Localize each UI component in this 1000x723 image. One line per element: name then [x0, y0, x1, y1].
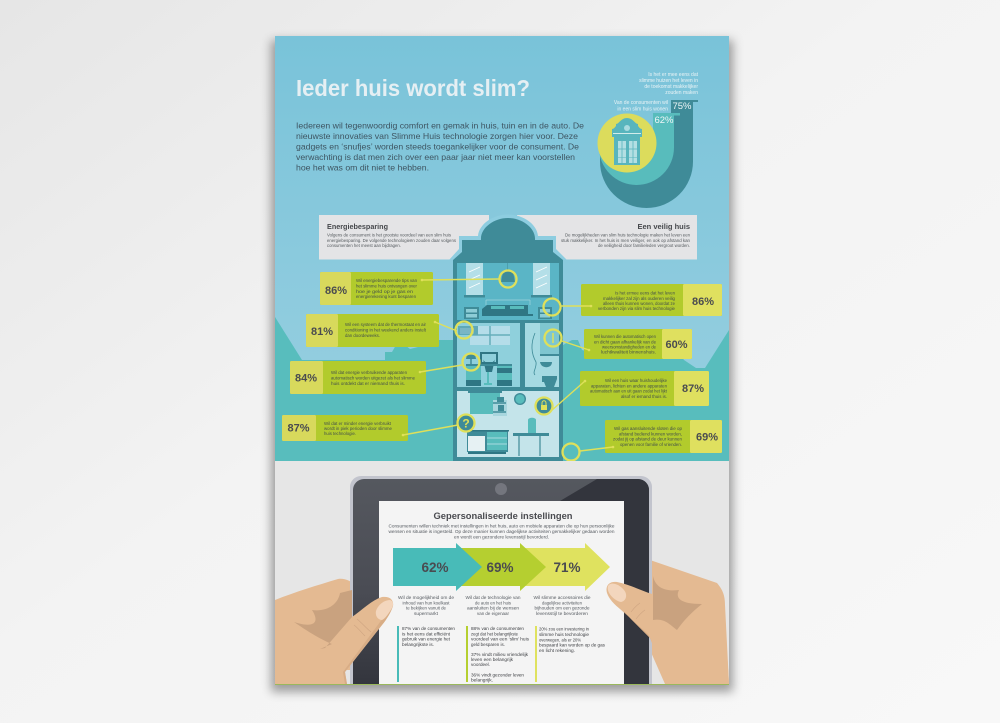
callout: 84% devices — [290, 361, 426, 394]
callout: 69% locks: Wil gas aansluitende sloten die op — [614, 426, 682, 431]
column details: zegt dat het belangrijkste — [471, 631, 518, 636]
column details — [397, 626, 606, 683]
column captions: Wil slimme accessoires die — [534, 595, 591, 601]
column captions: Wil dat de technologie van — [466, 595, 521, 601]
right hand back — [650, 560, 729, 684]
intro text block — [296, 120, 584, 172]
callout: 69% locks: 69% — [696, 432, 718, 444]
callout: 87% home automation: 87% — [682, 383, 704, 395]
landscape: hills and skyline — [275, 317, 729, 461]
right hand thumb — [606, 576, 729, 684]
callout: 84% devices: 84% — [295, 372, 317, 384]
callout: 86% elderly: 86% — [692, 296, 714, 308]
chart: radial stats 75% and 62% — [598, 72, 699, 208]
heading: Gepersonaliseerde instellingen: Gepersonaliseerde instellingen — [434, 511, 573, 522]
panel: Een veilig huis: de veiligheid door familieleden vergroot worden. — [598, 243, 690, 248]
callout: 60% windows: en dicht gaan afhankelijk van de — [594, 339, 656, 344]
nail — [608, 584, 626, 602]
chart: radial stats 75% and 62%: Is het er mee eens dat — [648, 72, 699, 78]
column details: bespaard kan worden op de gas — [539, 642, 606, 648]
callout: 86% elderly: Is het ermee eens dat het leven — [615, 290, 675, 296]
text block: tablet intro — [388, 524, 615, 540]
column captions: bijhouden om een gezonde — [534, 606, 590, 612]
illustration: house — [449, 214, 567, 461]
room: kitchen — [457, 391, 559, 457]
callout: 81% thermostat — [306, 314, 439, 347]
callout: 60% windows: weersomstandigheden en de — [602, 344, 656, 350]
column captions: van de eigenaar — [477, 611, 509, 617]
tablet — [350, 476, 652, 684]
text block: tablet intro: wensen en situatie is ingesteld. Op deze manier kunnen dagelijkse activiteiten gemakkelijker gedaan worden — [388, 529, 615, 535]
intro text block: hoe het was om dit niet te hebben. — [296, 162, 429, 172]
callout: 86% energy tips: 86% — [325, 285, 347, 297]
poster bottom edge — [275, 684, 729, 685]
panel: Een veilig huis — [517, 215, 697, 260]
column captions: inhoud van hun koelkast — [402, 600, 450, 606]
callout: 87% home automation: Wil een huis waar huishoudelijke — [605, 378, 667, 383]
room: bathroom — [525, 323, 559, 387]
screen — [379, 501, 624, 684]
chart: radial stats 75% and 62%: Van de consumenten wil — [614, 100, 668, 106]
callout: 87% home automation: apparaten, lichten en andere apparaten — [591, 383, 667, 388]
callout: 86% elderly: alleen thuis kunnen wonen, doordat ze — [603, 301, 675, 306]
connector lines and yellow hotspots — [402, 270, 614, 460]
panel: Een veilig huis: stuk makkelijker. In het huis is men veiliger, en ook op afstand kan — [561, 238, 690, 243]
intro text block: gadgets en ‘snufjes’ worden steeds toegankelijker voor de consument. De — [296, 142, 579, 152]
column details: overwegen, als er 20% — [539, 637, 581, 642]
panel: Energiebesparing — [319, 215, 489, 260]
column captions: levensstijl te bevorderen — [536, 611, 588, 617]
callout: 87% peak energy: 87% — [287, 422, 310, 434]
callout: 81% thermostat: 81% — [311, 326, 333, 338]
column captions: de auto en het huis — [475, 600, 512, 606]
callout: 81% thermostat: conditioning in het weekend anders instelt — [345, 328, 427, 332]
nail — [376, 600, 393, 620]
callout: 87% peak energy: Wil dat er minder energie verbruikt — [324, 421, 392, 426]
column details: 37% vindt milieu vriendelijk — [471, 652, 529, 657]
callout: 86% elderly: verbonden zijn via slim huis technologie — [598, 306, 675, 311]
panel: Een veilig huis: Een veilig huis — [637, 222, 690, 231]
chart: radial stats 75% and 62%: zouden maken — [665, 90, 698, 96]
callout: 69% locks: zodat jij op afstand de deur kunnen — [613, 437, 682, 442]
callout: 81% thermostat: Wil een systeem dat de thermostaat en air — [345, 322, 426, 327]
column details: belangrijk. — [471, 678, 493, 683]
callout: 81% thermostat: dan doordeweeks. — [345, 333, 380, 338]
callout: 86% elderly — [581, 284, 722, 316]
title: Ieder huis wordt slim? — [296, 75, 530, 101]
left hand thumb — [275, 590, 393, 684]
icon: camera — [495, 483, 507, 495]
chart: radial stats 75% and 62%: in een slim huis wonen — [617, 106, 668, 112]
callout: 86% energy tips: het slimme huis ontvangen over — [356, 284, 417, 288]
callout: 84% devices: automatisch worden uitgezet als het slimme — [331, 375, 415, 380]
callout: 87% home automation: alsof er iemand thuis is. — [621, 394, 667, 399]
callout: 60% windows: 60% — [665, 339, 688, 351]
column captions — [398, 595, 591, 617]
column details: slimme huis technologie — [539, 632, 589, 637]
column captions: supermarkt — [414, 611, 439, 617]
callout: 86% elderly: makkelijker zal zijn als ouderen veilig — [603, 296, 675, 301]
column details: leven een belangrijk — [471, 657, 514, 662]
room: study — [457, 323, 520, 387]
icon: question mark — [458, 414, 474, 432]
column details: is het eens dat efficiënt — [402, 631, 451, 636]
callout: 84% devices: Wil dat energie verbruikende apparaten — [331, 370, 407, 375]
callout: 69% locks — [605, 420, 722, 453]
callout: 86% energy tips — [320, 272, 433, 305]
callout: 86% energy tips: energierekening kunt besparen — [356, 294, 416, 299]
callout: 87% home automation — [580, 371, 709, 406]
callout: 60% windows — [584, 329, 692, 359]
panel: lower section background — [275, 461, 729, 684]
panel: Energiebesparing: energiebesparing. De volgende technologieën zouden daar volgens — [327, 238, 457, 243]
column details: 87% van de consumenten — [402, 626, 455, 631]
panel: Energiebesparing: Energiebesparing — [327, 222, 388, 231]
callout: 86% energy tips: Wil energiebesparende tips van — [356, 278, 417, 283]
text block: tablet intro: Consumenten willen techniek met instellingen in het huis, auto en mobiele apparaten die op hun persoonlijke — [388, 524, 615, 530]
chart: radial stats 75% and 62%: de toekomst makkelijker — [644, 84, 698, 90]
column captions: aansluiten bij de wensen — [467, 606, 519, 612]
callout: 60% windows: luchtkwaliteit binnenshuis. — [601, 350, 656, 354]
column details: belangrijkste is. — [402, 642, 434, 647]
callout: 69% locks: openen voor familie of vrienden. — [620, 442, 682, 447]
chart: radial stats 75% and 62%: 62% — [654, 115, 674, 126]
chart: three chevron arrows: 62% — [421, 560, 449, 575]
callout: 69% locks: afstand bediend kunnen worden, — [619, 431, 682, 436]
column details: 20% zou een investering in — [539, 627, 589, 632]
column captions: Wil de mogelijkheid om de — [398, 595, 454, 601]
intro text block: Iedereen wil tegenwoordig comfort en gemak in huis, tuin en in de auto. De — [296, 120, 584, 130]
panel: sky background — [275, 36, 729, 461]
text block: tablet intro: en wordt een gezondere levensstijl bevorderd. — [454, 534, 549, 540]
callout: 87% peak energy — [282, 415, 408, 441]
chart: three chevron arrows: 71% — [553, 560, 581, 575]
column details: 88% van de consumenten — [471, 626, 524, 631]
column details: gebruik van energie het — [402, 637, 451, 642]
column details: voordeel van een ‘slim’ huis — [471, 637, 530, 642]
panel: Energiebesparing: Volgens de consument is het grootste voordeel van een slim huis — [327, 232, 452, 238]
room: bedroom — [457, 263, 559, 320]
panel: Energiebesparing: consumenten het meest aan bijdragen. — [327, 243, 401, 248]
chart: three chevron arrows — [393, 543, 610, 591]
callout: 60% windows: Wil kunnen die automatisch open — [594, 334, 656, 339]
callout: 87% peak energy: huis technologie. — [324, 431, 356, 436]
intro text block: verwachting is dat men zich over een paar jaar niet meer kan voorstellen — [296, 152, 575, 162]
callout: 87% peak energy: wordt in piek perioden door slimme — [324, 426, 392, 431]
panel: Een veilig huis: De mogelijkheden van slim huis technologie maken het leven een — [565, 232, 690, 238]
chart: radial stats 75% and 62%: slimme huizen het leven in — [639, 78, 698, 84]
column details: 36% vindt gezonder leven — [471, 672, 524, 678]
column details: geld besparen is. — [471, 642, 505, 647]
column captions: te bekijken vanuit de — [406, 606, 446, 612]
icon: lock — [536, 398, 552, 414]
icon: house in yellow circle — [598, 114, 656, 172]
left hand back — [275, 579, 354, 684]
column captions: dagelijkse activiteiten — [542, 600, 582, 606]
callout: 87% home automation: automatisch aan en uit gaan zodat het lijkt — [590, 389, 668, 394]
icon: question mark: ? — [462, 416, 470, 430]
column details: en licht rekening. — [539, 648, 575, 653]
column details: voordeel. — [471, 662, 490, 667]
chart: radial stats 75% and 62%: 75% — [672, 101, 692, 112]
chart: three chevron arrows: 69% — [486, 560, 514, 575]
callout: 86% energy tips: hoe je geld op je gas en — [356, 289, 413, 294]
callout: 84% devices: huis ontdekt dat er niemand thuis is. — [331, 381, 405, 386]
intro text block: nieuwste innovaties van Slimme Huis technologie zorgen hier voor. Deze — [296, 131, 578, 141]
